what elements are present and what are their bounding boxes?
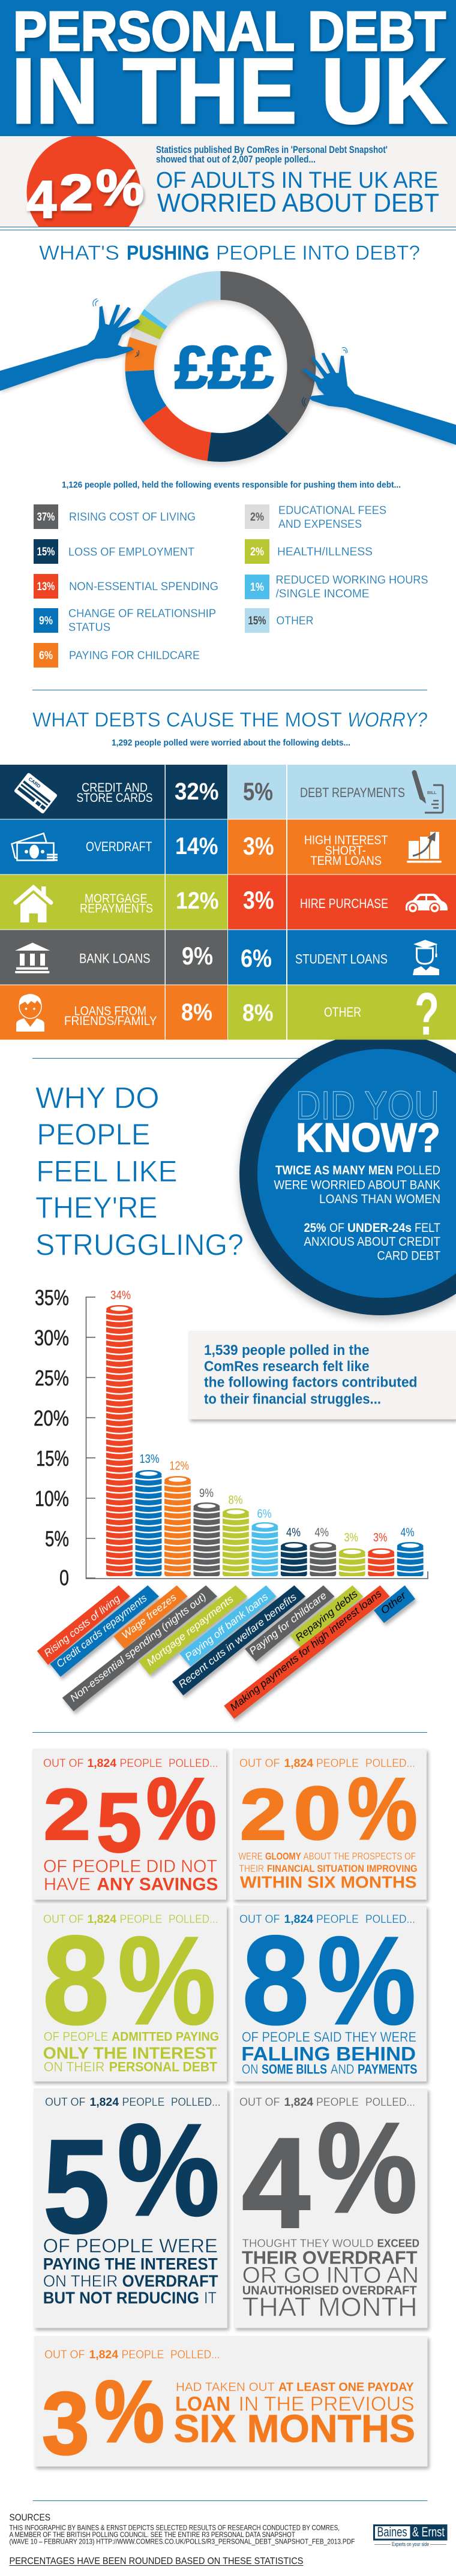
poll line: OUT OF xyxy=(45,2096,86,2109)
label: other: OTHER xyxy=(324,1005,361,1020)
sources body text xyxy=(10,2524,355,2545)
legend xyxy=(34,504,428,668)
poll line: OUT OF xyxy=(239,1913,280,1926)
poll line: 1,824 xyxy=(88,1757,116,1770)
poll line: OUT OF xyxy=(43,1913,84,1926)
legend percentages xyxy=(37,511,266,662)
ribbon: rising costs of living: Rising costs of living xyxy=(42,1592,122,1659)
value: 3%: 3% xyxy=(243,832,274,860)
icon: banknotes xyxy=(12,834,58,860)
poll line: 1,824 xyxy=(284,1913,313,1926)
description: ONLY THE INTEREST xyxy=(43,2044,217,2062)
poll line: OUT OF xyxy=(44,2348,85,2361)
value: 5%: 5% xyxy=(243,777,273,805)
did you know circle callout xyxy=(239,1032,456,1315)
y axis labels: 15% xyxy=(36,1446,69,1471)
did you know facts: UNDER-24s xyxy=(347,1221,412,1235)
icon: house xyxy=(16,886,51,922)
heading: debts that cause worry: WORRY? xyxy=(347,709,427,732)
poll line xyxy=(44,2348,220,2361)
legend swatches xyxy=(34,504,269,668)
callout: 1,539 people polled: the following factors contributed xyxy=(204,1375,418,1390)
logo: Baines & Ernst: Baines xyxy=(377,2524,407,2539)
legend labels: REDUCED WORKING HOURS xyxy=(276,573,428,587)
label: high interest short-term loans: TERM LOANS xyxy=(311,854,382,868)
icon: pen and bill xyxy=(414,773,443,813)
bar value labels: 8% xyxy=(228,1493,243,1507)
worry poll text: 1,292 people polled were worried about the following debts... xyxy=(112,738,350,748)
segment: rising cost of living 37% xyxy=(221,271,316,434)
description: OF PEOPLE DID NOT xyxy=(43,1857,217,1876)
poll line: POLLED... xyxy=(170,2348,220,2361)
legend labels: HEALTH/ILLNESS xyxy=(277,545,373,558)
stat card: 4% xyxy=(234,2088,427,2328)
legend labels: /SINGLE INCOME xyxy=(276,587,370,600)
bar value labels: 3% xyxy=(344,1531,358,1544)
segment: loss of employment 15% xyxy=(207,414,288,462)
heading: pushing people into debt: PUSHING xyxy=(127,242,209,264)
description: ON xyxy=(242,2062,258,2076)
description: GLOOMY xyxy=(265,1851,301,1862)
intro text: Statistics published By ComRes in 'Personal Debt Snapshot' xyxy=(156,144,388,155)
bar value labels: 4% xyxy=(286,1526,301,1539)
did you know facts: OF xyxy=(329,1221,344,1235)
sources body text: A MEMBER OF THE BRITISH POLLING COUNCIL. SEE THE ENTIRE R3 PERSONAL DATA SNAPSHOT xyxy=(10,2531,295,2539)
big figure: 3 xyxy=(42,2374,89,2473)
bar value labels: 13% xyxy=(139,1453,160,1466)
row: friends and family, other xyxy=(0,981,456,1048)
segment: non-essential spending 13% xyxy=(143,405,211,461)
poll line: OUT OF xyxy=(239,1757,280,1770)
segment: childcare 6% xyxy=(125,337,157,371)
legend labels: NON-ESSENTIAL SPENDING xyxy=(69,580,218,593)
big figure: % xyxy=(317,1911,416,2051)
legend percentages: 13% xyxy=(37,581,55,593)
sources body text: (WAVE 10 – FEBRUARY 2013) HTTP://WWW.COMRES.CO.UK/POLLS/R3_PERSONAL_DEBT_SNAPSHOT_FEB_2013.PDF xyxy=(10,2538,355,2545)
did you know facts: 25% xyxy=(304,1221,326,1235)
legend labels: EDUCATIONAL FEES xyxy=(278,504,386,517)
poll line xyxy=(43,1913,218,1926)
description xyxy=(43,2235,218,2307)
stat card: 5% xyxy=(34,2088,227,2328)
legend labels: AND EXPENSES xyxy=(278,518,362,531)
poll line: POLLED... xyxy=(169,1757,218,1770)
rotated category ribbons xyxy=(37,1585,415,1719)
description: HAD TAKEN OUT xyxy=(176,2380,275,2394)
legend labels: OTHER xyxy=(276,614,313,627)
legend percentages: 6% xyxy=(39,650,53,662)
description: THEIR xyxy=(239,1863,264,1874)
ribbon: wage freezes xyxy=(113,1585,188,1649)
ribbon: repaying debts: Repaying debts xyxy=(293,1588,360,1643)
big figure xyxy=(42,2362,164,2473)
42 percent figure xyxy=(26,160,144,229)
icon: right hand xyxy=(302,347,456,445)
description: SOME BILLS xyxy=(262,2062,327,2076)
poll line xyxy=(43,1757,218,1770)
ribbon: paying for childcare: Paying for childcare xyxy=(247,1589,329,1657)
row: credit cards and debt repayments xyxy=(0,765,456,819)
ribbon: mortgage repayments: Mortgage repayments xyxy=(145,1593,236,1668)
label: mortgage repayments xyxy=(80,892,153,915)
description: WERE xyxy=(239,1851,263,1862)
callout: 1,539 people polled: 1,539 people polled in the xyxy=(204,1342,370,1358)
poll line: PEOPLE xyxy=(316,1913,359,1926)
poll line xyxy=(239,2096,415,2109)
poll line: POLLED... xyxy=(169,1913,218,1926)
description: LOAN xyxy=(175,2393,230,2416)
icon: left hand xyxy=(0,299,140,391)
description: THAT MONTH xyxy=(242,2292,418,2322)
circle background xyxy=(239,1032,456,1315)
label: credit and store cards: CREDIT AND xyxy=(82,781,148,795)
big figure: % xyxy=(95,2362,164,2460)
value: 8% other: 8% xyxy=(242,1000,274,1026)
intro text: showed that out of 2,007 people polled... xyxy=(156,154,316,165)
stat card: 8% falling behind xyxy=(233,1905,427,2081)
heading: pushing people into debt: WHAT'S xyxy=(39,242,119,264)
value: 14%: 14% xyxy=(175,833,218,859)
big figure xyxy=(242,2096,418,2255)
bar value labels: 4% xyxy=(314,1526,329,1539)
intro headline xyxy=(156,168,439,218)
segment: health 2% xyxy=(133,314,165,339)
intro band: 42% xyxy=(0,136,456,227)
red circle xyxy=(26,136,140,227)
heading: why do people feel like they're struggling: THEY'RE xyxy=(35,1191,157,1225)
description: ON THEIR xyxy=(43,2272,118,2290)
value: 3% hire purchase: 3% xyxy=(243,886,274,914)
heading: why do people feel like they're struggling: WHY DO xyxy=(35,1081,160,1114)
callout: 1,539 people polled: ComRes research felt like xyxy=(204,1358,370,1375)
y axis labels: 30% xyxy=(34,1325,69,1350)
description: IT xyxy=(204,2289,217,2307)
bar value labels: 4% xyxy=(401,1526,415,1539)
row: mortgage and hire purchase xyxy=(0,874,456,930)
debts grid xyxy=(0,765,456,1048)
icon: pen and bill: BILL xyxy=(427,791,437,795)
legend percentages: 37% xyxy=(37,511,55,524)
description: PERSONAL DEBT xyxy=(109,2060,218,2074)
ribbon: wage freezes: Wage freezes xyxy=(119,1591,179,1641)
legend percentages: 1% xyxy=(250,581,264,594)
description: FALLING BEHIND xyxy=(241,2043,416,2064)
ribbon: recent cuts in welfare benefits: Recent cuts in welfare benefits xyxy=(176,1591,299,1690)
heading: pushing people into debt xyxy=(39,242,420,264)
value: 6%: 6% xyxy=(241,944,272,972)
legend labels: RISING COST OF LIVING xyxy=(69,510,196,524)
bars: coin stacks xyxy=(106,1305,424,1576)
rounding note: PERCENTAGES HAVE BEEN ROUNDED BASED ON THESE STATISTICS xyxy=(10,2556,304,2566)
sources xyxy=(10,2513,355,2545)
poll line: 1,824 xyxy=(89,2348,118,2361)
legend percentages: 15% xyxy=(37,546,55,558)
icon: bank xyxy=(15,943,50,973)
did you know heading: KNOW? xyxy=(296,1115,440,1161)
legend percentages: 2% xyxy=(250,511,264,524)
big figure: % xyxy=(317,2096,418,2240)
big figure: % xyxy=(118,1911,216,2051)
donut chart xyxy=(125,271,316,462)
bar value labels: 9% xyxy=(199,1487,214,1500)
did you know heading xyxy=(296,1083,440,1161)
logo: Baines & Ernst: & Ernst xyxy=(412,2524,445,2539)
heading: why do people feel like they're struggling: FEEL LIKE xyxy=(36,1155,178,1188)
description xyxy=(241,2029,418,2076)
ribbon: paying off bank loans: Paying off bank loans xyxy=(183,1591,271,1663)
description: EXCEED xyxy=(377,2237,419,2249)
segment: educational fees 2% xyxy=(130,327,160,346)
y axis labels: 5% xyxy=(45,1526,69,1551)
description xyxy=(173,2380,415,2451)
poll line: PEOPLE xyxy=(316,1757,359,1770)
row: bank loans and student loans xyxy=(0,930,456,985)
description: BUT NOT REDUCING xyxy=(43,2289,199,2307)
poll line: OUT OF xyxy=(239,2096,280,2109)
ribbon: other: Other xyxy=(379,1589,409,1616)
description: WITHIN SIX MONTHS xyxy=(240,1872,417,1892)
big figure: 2 xyxy=(44,1774,91,1854)
segment: relationship status 9% xyxy=(125,370,166,422)
stat card: 25% xyxy=(32,1749,226,1900)
label: student loans: STUDENT LOANS xyxy=(295,951,388,967)
label: high interest short-term loans: HIGH INTEREST xyxy=(304,834,388,847)
did you know facts: LOANS THAN WOMEN xyxy=(319,1192,440,1206)
big figure xyxy=(240,1760,418,1857)
bar value labels xyxy=(110,1289,415,1544)
description: FINANCIAL SITUATION IMPROVING xyxy=(267,1863,418,1874)
poll line: PEOPLE xyxy=(122,2096,164,2109)
icon: person xyxy=(16,994,44,1032)
poll line: POLLED... xyxy=(365,2096,415,2109)
big figure xyxy=(43,2097,220,2261)
description xyxy=(43,2030,219,2074)
value: 32%: 32% xyxy=(175,778,218,805)
did you know facts xyxy=(274,1164,440,1263)
bar chart: factors in financial struggles xyxy=(34,1285,428,1719)
label: credit and store cards xyxy=(77,781,152,805)
description: OF PEOPLE WERE xyxy=(43,2235,218,2256)
stat card: 20% xyxy=(233,1749,427,1900)
poll line: PEOPLE xyxy=(120,1757,162,1770)
ribbon: credit cards repayments: Credit cards repayments xyxy=(54,1592,149,1670)
description: OF PEOPLE SAID THEY WERE xyxy=(242,2029,416,2045)
description: PAYMENTS xyxy=(358,2062,418,2076)
sources: SOURCES xyxy=(10,2513,50,2523)
42 percent figure: % xyxy=(96,160,144,216)
label: credit and store cards: STORE CARDS xyxy=(77,791,152,805)
big figure: 5 xyxy=(43,2112,110,2261)
y axis labels: 25% xyxy=(35,1366,69,1390)
icon: graduate xyxy=(413,940,439,975)
did you know facts: ANXIOUS ABOUT CREDIT xyxy=(304,1235,440,1249)
logo: Baines & Ernst: Experts on your side xyxy=(392,2541,429,2547)
description: SIX MONTHS xyxy=(173,2406,415,2451)
y axis labels: 10% xyxy=(35,1486,69,1511)
description: UNAUTHORISED OVERDRAFT xyxy=(242,2284,417,2297)
poll line: 1,824 xyxy=(284,2096,313,2109)
did you know facts: TWICE AS MANY MEN xyxy=(275,1164,393,1177)
poll line xyxy=(239,1757,415,1770)
description: ADMITTED PAYING xyxy=(112,2030,219,2044)
label: mortgage repayments: MORTGAGE xyxy=(85,892,148,906)
poll line: PEOPLE xyxy=(316,2096,359,2109)
value: 8%: 8% xyxy=(181,999,212,1026)
legend labels xyxy=(68,504,428,662)
label: loans from friends and family: LOANS FROM xyxy=(74,1004,146,1018)
poll line: 1,824 xyxy=(284,1757,313,1770)
big figure: 8 xyxy=(43,1910,109,2051)
intro headline: OF ADULTS IN THE UK ARE xyxy=(156,168,438,193)
big figure: 4 xyxy=(242,2111,310,2255)
label: hire purchase: HIRE PURCHASE xyxy=(300,896,388,911)
poll intro text: 1,126 people polled, held the following events responsible for pushing them into debt... xyxy=(62,480,401,490)
row: overdraft and short-term loans xyxy=(0,819,456,874)
label: bank loans: BANK LOANS xyxy=(79,951,150,966)
callout: 1,539 people polled: to their financial struggles... xyxy=(204,1391,381,1407)
bar value labels: 12% xyxy=(169,1460,189,1473)
description xyxy=(239,1851,418,1892)
big figure: 8 xyxy=(242,1910,309,2051)
ribbon: non-essential spending: Non-essential spending (nights out) xyxy=(68,1591,208,1704)
poll line: 1,824 xyxy=(90,2096,119,2109)
label: loans from friends and family: FRIENDS/FAMILY xyxy=(64,1014,157,1028)
poll line: POLLED... xyxy=(365,1757,415,1770)
description: OF PEOPLE xyxy=(44,2030,108,2044)
legend labels: PAYING FOR CHILDCARE xyxy=(69,649,200,662)
did you know facts: CARD DEBT xyxy=(377,1249,440,1263)
legend percentages: 15% xyxy=(248,615,266,627)
big figure xyxy=(44,1760,217,1869)
stat card: 8% interest xyxy=(32,1905,227,2081)
pound signs: £££ xyxy=(175,334,274,401)
icon: credit card xyxy=(14,773,58,814)
bar value labels: 3% xyxy=(373,1531,388,1544)
y axis labels: 0 xyxy=(59,1565,69,1590)
ribbon: other xyxy=(374,1585,415,1623)
description xyxy=(43,1857,218,1894)
stat card: 3% xyxy=(34,2336,427,2473)
big figure xyxy=(242,1910,416,2051)
legend percentages: 9% xyxy=(39,615,53,627)
poll line: PEOPLE xyxy=(121,2348,164,2361)
big figure: 2 xyxy=(240,1774,287,1854)
heading: why do people feel like they're struggling: STRUGGLING? xyxy=(35,1228,244,1262)
label: mortgage repayments: REPAYMENTS xyxy=(80,902,153,915)
label: debt repayments: DEBT REPAYMENTS xyxy=(300,785,405,800)
label: overdraft: OVERDRAFT xyxy=(86,839,152,854)
description: AT LEAST ONE PAYDAY xyxy=(278,2380,414,2394)
did you know facts: FELT xyxy=(415,1221,440,1235)
logo: Baines & Ernst xyxy=(373,2524,448,2547)
icon: credit card: CARD xyxy=(28,776,41,789)
big figure: 5 xyxy=(97,1775,142,1869)
description xyxy=(242,2237,419,2322)
poll line xyxy=(45,2096,221,2109)
poll line xyxy=(239,1913,415,1926)
y axis labels: 35% xyxy=(35,1285,69,1310)
description: AND xyxy=(331,2062,354,2076)
legend percentages: 2% xyxy=(250,546,264,558)
poll line: POLLED... xyxy=(365,1913,415,1926)
icon: rising bar chart xyxy=(407,832,442,862)
description: HAVE xyxy=(44,1875,91,1894)
heading: why do people feel like they're struggling xyxy=(35,1081,244,1262)
42 percent figure: 2 xyxy=(59,164,93,221)
ribbon: mortgage repayments xyxy=(139,1585,247,1675)
heading: debts that cause worry: WHAT DEBTS CAUSE THE MOST xyxy=(32,709,342,732)
heading: why do people feel like they're struggling: PEOPLE xyxy=(37,1118,150,1152)
heading: pushing people into debt: PEOPLE INTO DEBT? xyxy=(216,242,420,264)
bar value labels: 6% xyxy=(257,1508,272,1521)
label: loans from friends and family xyxy=(64,1004,157,1028)
y axis labels xyxy=(34,1285,69,1590)
description: OVERDRAFT xyxy=(122,2272,218,2290)
label: high interest short-term loans xyxy=(304,834,388,868)
intro text xyxy=(156,144,388,165)
y axis labels: 20% xyxy=(34,1406,69,1430)
description: THOUGHT THEY WOULD xyxy=(242,2237,374,2249)
header banner xyxy=(0,0,456,143)
big figure: 0 xyxy=(294,1772,341,1855)
legend labels: CHANGE OF RELATIONSHIP xyxy=(68,607,216,620)
value: 12%: 12% xyxy=(176,888,218,914)
description: ABOUT THE PROSPECTS OF xyxy=(304,1851,416,1862)
poll line: PEOPLE xyxy=(120,1913,162,1926)
description: ON THEIR xyxy=(44,2060,104,2074)
description: ANY SAVINGS xyxy=(97,1875,218,1894)
poll line: POLLED... xyxy=(171,2096,221,2109)
did you know facts: WERE WORRIED ABOUT BANK xyxy=(274,1178,440,1192)
did you know facts: POLLED xyxy=(396,1164,440,1177)
value: 9%: 9% xyxy=(182,942,213,970)
icon: car xyxy=(406,894,448,913)
label: high interest short-term loans: SHORT- xyxy=(325,844,366,858)
icon: question mark: ? xyxy=(415,981,439,1048)
intro headline: WORRIED ABOUT DEBT xyxy=(157,188,439,218)
big figure xyxy=(43,1910,216,2051)
description: OR GO INTO AN xyxy=(242,2263,419,2288)
ribbon: making payments for high interest loans: Making payments for high interest loans xyxy=(228,1588,384,1713)
description: PAYING THE INTEREST xyxy=(43,2255,218,2273)
axes xyxy=(86,1297,428,1579)
legend labels: STATUS xyxy=(68,621,110,634)
big figure: % xyxy=(117,2097,220,2243)
big figure: % xyxy=(347,1760,418,1857)
sources body text: THIS INFOGRAPHIC BY BAINES & ERNST DEPICTS SELECTED RESULTS OF RESEARCH CONDUCTED BY COMRES, xyxy=(10,2524,340,2532)
big figure: % xyxy=(146,1760,217,1857)
42 percent figure: 4 xyxy=(26,170,56,229)
segment: other 15% xyxy=(144,271,221,326)
legend labels: LOSS OF EMPLOYMENT xyxy=(68,546,194,559)
bar value labels: 34% xyxy=(110,1289,131,1302)
description: IN THE PREVIOUS xyxy=(239,2393,415,2416)
callout: 1,539 people polled xyxy=(188,1331,456,1419)
poll line: 1,824 xyxy=(88,1913,116,1926)
description: THEIR OVERDRAFT xyxy=(242,2248,418,2268)
poll line: OUT OF xyxy=(43,1757,84,1770)
segment: reduced hours 1% xyxy=(141,309,167,330)
